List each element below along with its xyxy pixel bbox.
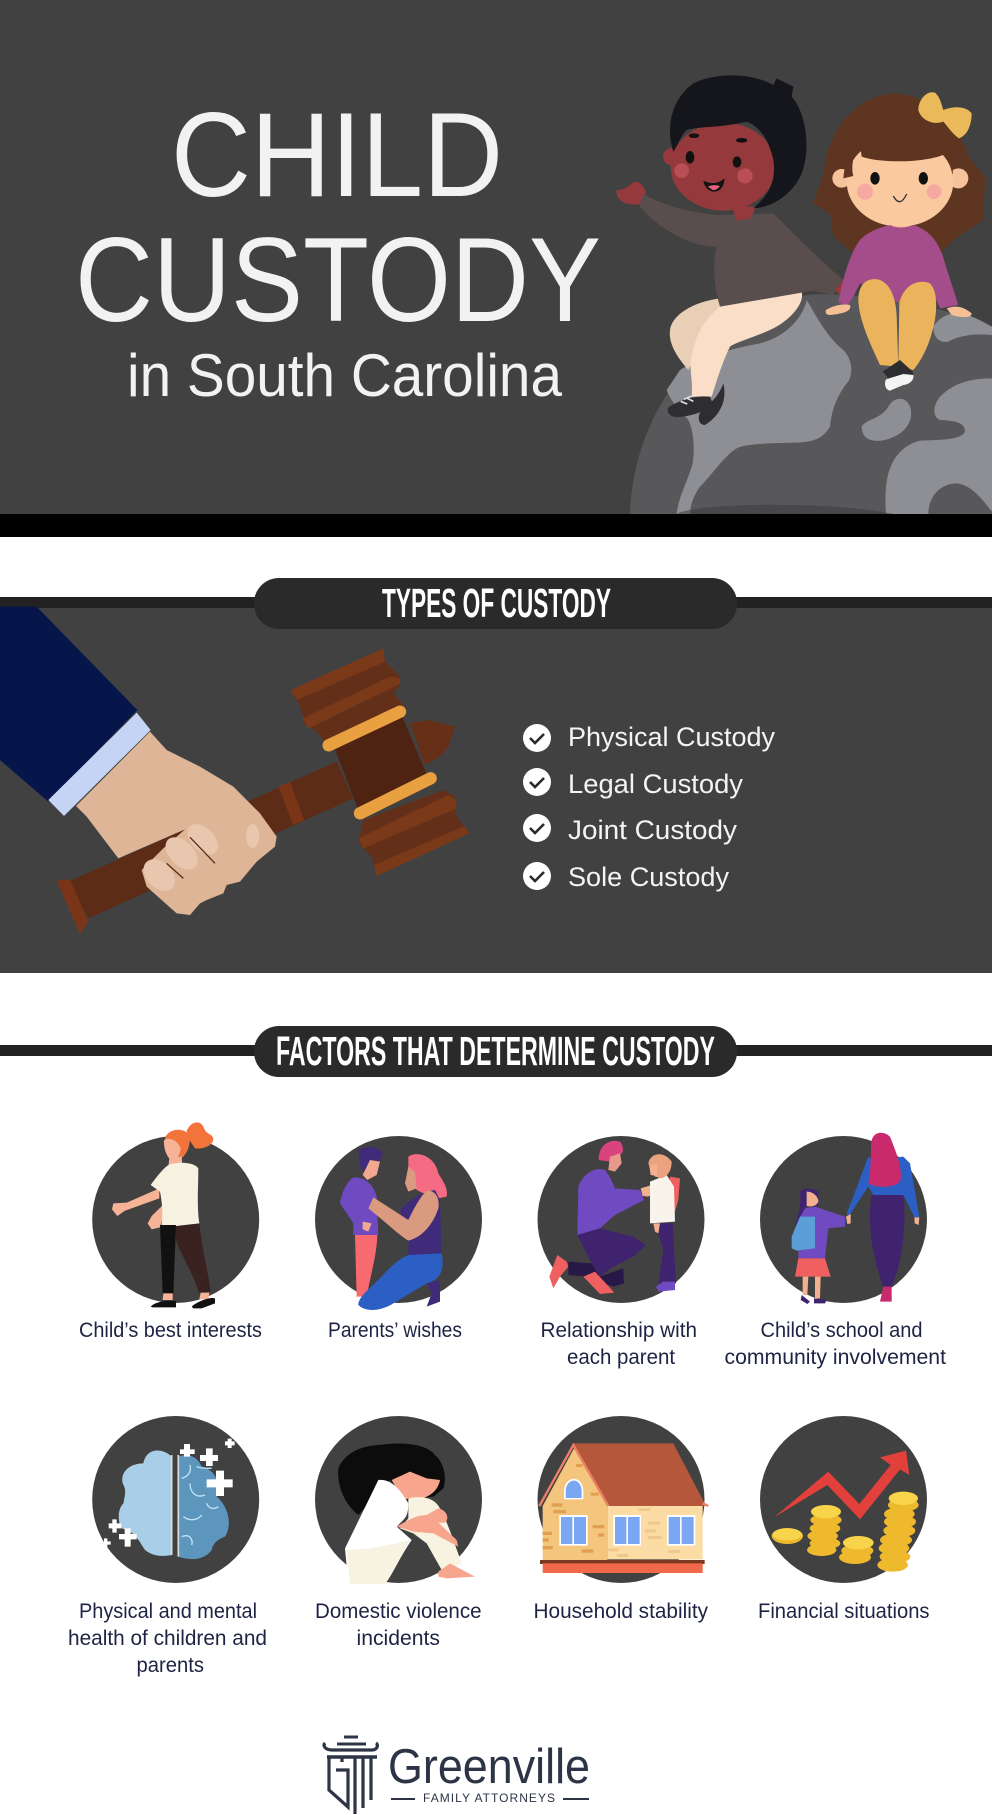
label: Household stability (534, 1600, 708, 1623)
icon: father and child with backpack (549, 1141, 680, 1294)
heading pill: types of custody: TYPES OF CUSTODY (382, 580, 611, 626)
checklist: custody types (523, 722, 775, 892)
icon: house (539, 1443, 708, 1573)
wordmark: Greenville (388, 1740, 590, 1794)
factor: financial situations (758, 1416, 930, 1623)
item: sole custody: Sole Custody (568, 862, 729, 892)
tagline: FAMILY ATTORNEYS (423, 1791, 555, 1805)
item: physical custody: Physical Custody (568, 722, 775, 752)
label: Child’s best interests (79, 1319, 262, 1342)
icon: woman hugging knees (338, 1443, 475, 1584)
item: legal custody: Legal Custody (568, 769, 743, 799)
label: Relationship with (540, 1319, 697, 1342)
label: Parents’ wishes (328, 1319, 462, 1342)
title (75, 88, 601, 409)
label: Financial situations (758, 1600, 930, 1623)
icon: mother and daughter holding hands (792, 1133, 919, 1304)
factor: domestic violence incidents (315, 1416, 482, 1650)
logo: Greenville Family Attorneys (324, 1737, 590, 1814)
title: CHILD (171, 88, 503, 222)
girl (813, 92, 985, 391)
factor: relationship with each parent: each parent (567, 1346, 675, 1369)
factor: domestic violence incidents: incidents (356, 1627, 440, 1650)
icon: girl with open arms (112, 1122, 215, 1308)
label: Physical and mental (79, 1600, 257, 1623)
factor: physical and mental health: parents (136, 1654, 204, 1677)
title: CUSTODY (75, 213, 601, 347)
panel: types of custody (0, 578, 992, 973)
label: Domestic violence (315, 1600, 482, 1623)
factor: child's best interests (79, 1122, 262, 1342)
heading pill: types of custody (254, 578, 737, 629)
icon: mother and son (340, 1147, 447, 1310)
boy (617, 75, 848, 425)
item: joint custody: Joint Custody (568, 815, 738, 845)
heading: factors that determine custody (0, 1026, 992, 1077)
factor: child's school and community involvement: community involvement (724, 1346, 946, 1369)
factor: parents' wishes (315, 1136, 482, 1342)
icon: column logo (324, 1737, 377, 1814)
icon: brain with plus signs (104, 1439, 235, 1559)
illustration: hand holding gavel (0, 607, 469, 934)
icon: rising arrow and coins (772, 1451, 919, 1572)
factor: household stability (534, 1416, 708, 1623)
factor: child's school and community involvement (724, 1133, 946, 1369)
illustration: children sitting on a globe (617, 75, 992, 514)
title: in South Carolina (127, 342, 563, 409)
factor: physical and mental health (68, 1416, 267, 1677)
factor: physical and mental health: health of children and (68, 1627, 267, 1650)
label: Child’s school and (760, 1319, 922, 1342)
factor: relationship with each parent (538, 1136, 704, 1369)
panel: header (0, 0, 992, 537)
